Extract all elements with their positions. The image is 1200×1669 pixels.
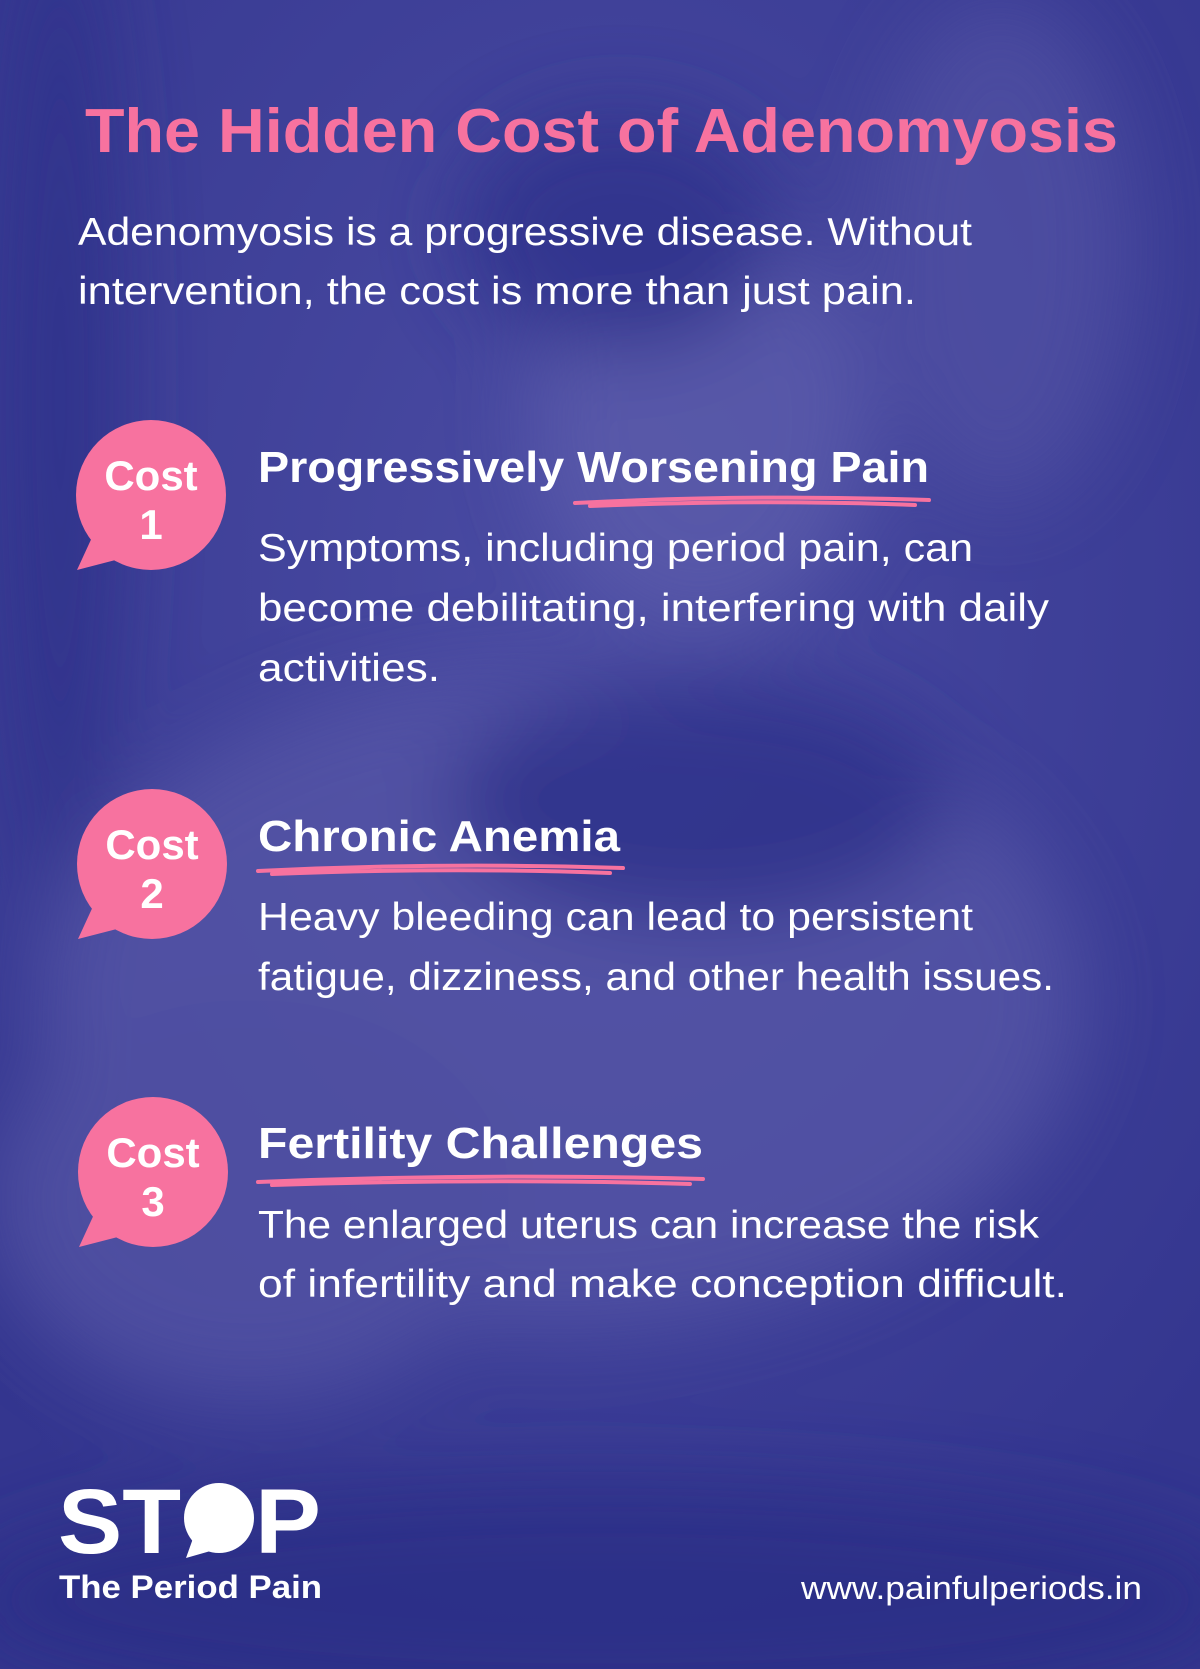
heading 2: Chronic Anemia [258, 812, 621, 861]
badge: cost 2 [77, 789, 227, 939]
badge: cost 3: 3 [141, 1178, 165, 1225]
underline 1 [575, 498, 929, 506]
underline 3 [258, 1177, 703, 1185]
title: The Hidden Cost of Adenomyosis [85, 97, 1118, 166]
badge: cost 1: 1 [139, 501, 163, 548]
body 2: fatigue, dizziness, and other health issues. [258, 956, 1054, 999]
badge: cost 3 [78, 1097, 228, 1247]
body 2: Heavy bleeding can lead to persistent [258, 896, 973, 939]
cost 1 item [76, 420, 1050, 690]
heading 1: Progressively Worsening Pain [258, 443, 929, 492]
intro text: intervention, the cost is more than just pain. [78, 270, 916, 313]
body 3: of infertility and make conception difficult. [258, 1263, 1067, 1306]
intro text: Adenomyosis is a progressive disease. Without [78, 211, 972, 254]
logo: STOP The Period Pain [58, 1471, 322, 1605]
body 1: become debilitating, interfering with daily [258, 587, 1050, 630]
website url: www.painfulperiods.in [800, 1570, 1142, 1606]
underline 2 [258, 866, 623, 874]
intro text [78, 211, 972, 313]
cost 3 item [78, 1097, 1067, 1306]
badge: cost 3: Cost [106, 1129, 200, 1176]
body 1 [258, 527, 1050, 690]
body 1: Symptoms, including period pain, can [258, 527, 973, 570]
badge: cost 2: 2 [140, 870, 164, 917]
body 3: The enlarged uterus can increase the risk [258, 1204, 1040, 1247]
badge: cost 1: Cost [104, 452, 198, 499]
logo: STOP The Period Pain: ST [58, 1471, 181, 1573]
badge: cost 2: Cost [105, 821, 199, 868]
logo: STOP The Period Pain: The Period Pain [59, 1569, 322, 1605]
logo: STOP The Period Pain: P [255, 1471, 321, 1573]
body 2 [258, 896, 1054, 999]
heading 3: Fertility Challenges [258, 1119, 703, 1168]
badge: cost 1 [76, 420, 226, 570]
body 3 [258, 1204, 1067, 1306]
body 1: activities. [258, 647, 440, 690]
cost 2 item [77, 789, 1054, 999]
